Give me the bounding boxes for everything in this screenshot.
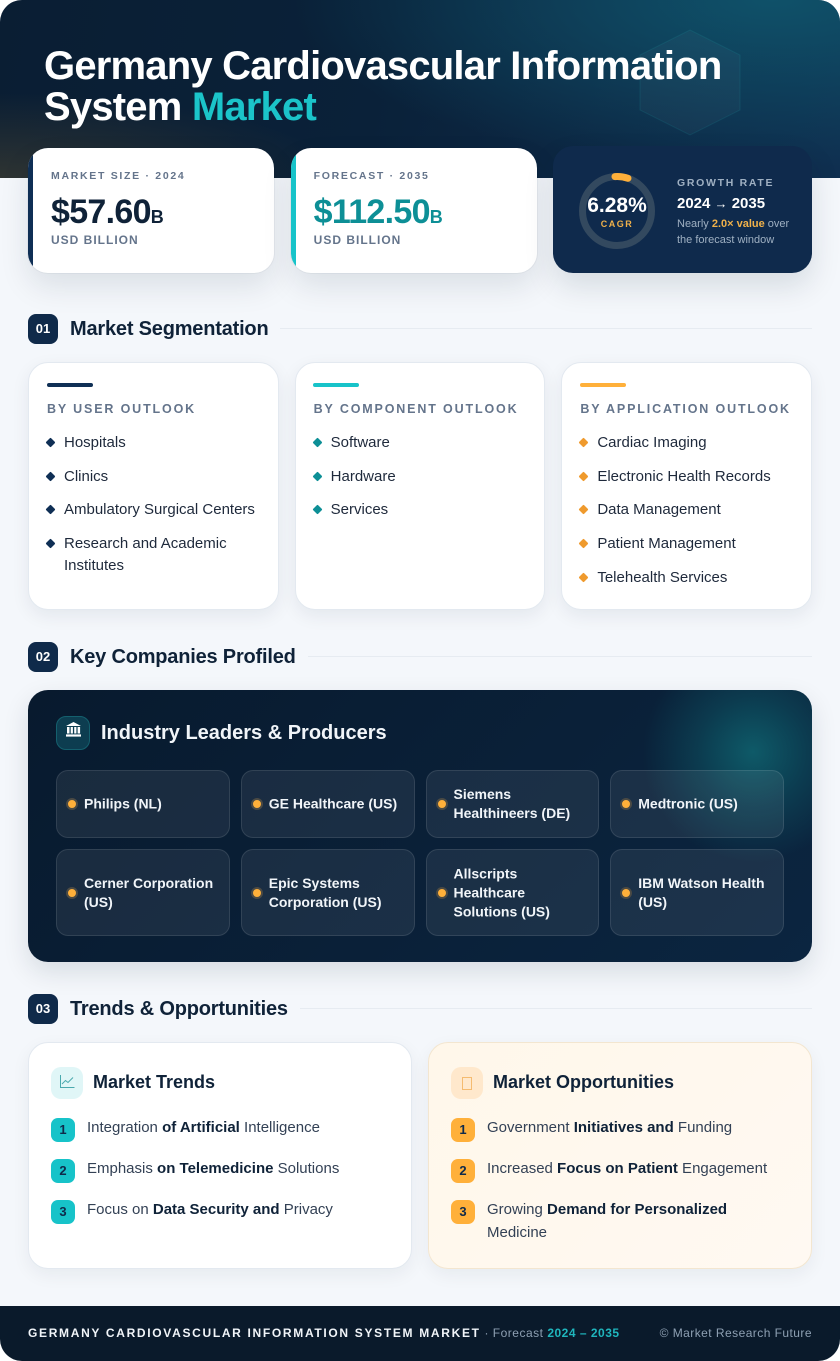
panel heading: Industry Leaders & Producers [101, 722, 387, 744]
section heading: trends: Trends & Opportunities [70, 998, 288, 1020]
growth note: Nearly 2.0× value over [677, 218, 789, 230]
company: Philips [56, 770, 230, 838]
panel: market trends: Integration of Artificial Intelligence [87, 1119, 320, 1136]
panel: component outlook: Hardware [331, 468, 396, 485]
company: Allscripts: Allscripts [454, 865, 517, 881]
opportunity 2: 2 [459, 1163, 467, 1178]
stat card: market size: MARKET SIZE · 2024 [51, 170, 185, 182]
icon: bank [56, 716, 90, 750]
company: Epic [241, 849, 414, 936]
company: Allscripts [426, 849, 599, 936]
company: GE Healthcare [241, 770, 414, 838]
panel: market opportunities: Government Initiatives and Funding [487, 1119, 732, 1136]
panel: application outlook: Data Management [597, 501, 721, 518]
opportunity 1 [451, 1118, 475, 1142]
panel: industry leaders [28, 690, 812, 962]
section heading: key companies [28, 642, 812, 672]
panel: market trends: Focus on Data Security and Privacy [87, 1201, 333, 1218]
company: Allscripts: Healthcare [454, 884, 525, 900]
company: Medtronic [610, 770, 784, 838]
stat card: market size: USD BILLION [51, 233, 139, 247]
panel: component outlook: Services [331, 501, 388, 518]
company: Siemens [426, 770, 599, 838]
trend 2: 2 [59, 1163, 67, 1178]
growth note [677, 218, 789, 246]
header banner [0, 0, 840, 178]
growth rate label: GROWTH RATE [677, 177, 774, 189]
section heading: key companies: Key Companies Profiled [70, 646, 296, 668]
stat card: market size [28, 148, 274, 273]
company: Epic: Corporation (US) [269, 894, 382, 910]
icon: opportunity glyph [451, 1067, 483, 1099]
stat card: forecast: $112.50B [314, 193, 443, 231]
icon: chart [51, 1067, 83, 1099]
opportunity 1: 1 [459, 1122, 467, 1137]
stat card: market size: $57.60B [51, 193, 164, 231]
CAGR label: CAGR [601, 219, 633, 229]
company: Epic: Epic Systems [269, 874, 360, 890]
footer credit: © Market Research Future [660, 1326, 812, 1340]
opportunity 3 [451, 1200, 475, 1224]
panel: component outlook [295, 362, 545, 610]
panel: user outlook: Institutes [64, 556, 124, 574]
trend 1: 1 [59, 1122, 67, 1137]
panel: market opportunities: Medicine [487, 1224, 547, 1241]
panel: application outlook: BY APPLICATION OUTLOOK [580, 402, 791, 416]
footer title: GERMANY CARDIOVASCULAR INFORMATION SYSTEM MARKET · Forecast 2024 – 2035 [28, 1326, 620, 1340]
company: Cerner: (US) [84, 894, 113, 910]
section heading: trends: 03 [36, 1001, 50, 1016]
company: Siemens: Healthineers (DE) [454, 805, 570, 821]
section heading: market segmentation: 01 [36, 321, 50, 336]
panel: user outlook: Research and Academic [64, 535, 227, 552]
section heading: trends [28, 994, 812, 1024]
panel: market opportunities: Market Opportunities [493, 1072, 674, 1092]
panel: component outlook: Software [331, 434, 390, 451]
panel: application outlook [561, 362, 812, 610]
panel: user outlook: Hospitals [64, 434, 126, 451]
panel: application outlook: Patient Management [597, 535, 736, 552]
company: IBM Watson: (US) [638, 894, 667, 910]
panel: application outlook: Cardiac Imaging [597, 434, 707, 451]
title: Germany Cardiovascular Information [44, 44, 721, 88]
section heading: market segmentation [28, 314, 812, 344]
CAGR ring [579, 173, 655, 249]
panel: market opportunities [428, 1042, 812, 1269]
panel: application outlook: Electronic Health Records [597, 468, 771, 485]
title [44, 44, 721, 129]
stat card: forecast: USD BILLION [314, 233, 401, 247]
stat card: forecast: FORECAST · 2035 [314, 170, 430, 182]
trend 3: 3 [59, 1204, 67, 1219]
trend 3 [51, 1200, 75, 1224]
period: 2024 → 2035 [677, 195, 765, 212]
company: IBM Watson [610, 849, 784, 936]
stat card: growth rate [553, 146, 812, 273]
company: Cerner [56, 849, 230, 936]
company: Medtronic: Medtronic (US) [638, 796, 738, 812]
panel: user outlook: Clinics [64, 468, 108, 485]
company: Allscripts: Solutions (US) [454, 903, 550, 919]
company: Cerner: Cerner Corporation [84, 874, 213, 890]
panel: market trends [28, 1042, 412, 1269]
panel: user outlook [28, 362, 279, 610]
panel: component outlook: BY COMPONENT OUTLOOK [314, 402, 518, 416]
company: GE Healthcare: GE Healthcare (US) [269, 796, 397, 812]
panel: market opportunities: Increased Focus on Patient Engagement [487, 1160, 767, 1177]
growth note: the forecast window [677, 234, 774, 246]
stat card: forecast [291, 148, 537, 273]
panel: market opportunities: Growing Demand for Personalized [487, 1201, 727, 1218]
decorative hexagon [640, 30, 740, 136]
company: Siemens: Siemens [454, 786, 511, 802]
CAGR value: 6.28% [587, 194, 647, 217]
opportunity 2 [451, 1159, 475, 1183]
panel: application outlook: Telehealth Services [597, 569, 727, 586]
footer [0, 1306, 840, 1361]
company: Philips: Philips (NL) [84, 796, 162, 812]
panel: user outlook: Ambulatory Surgical Centers [64, 501, 255, 518]
trend 2 [51, 1159, 75, 1183]
panel: market trends: Market Trends [93, 1072, 215, 1092]
title: System Market [44, 85, 316, 129]
panel: user outlook: BY USER OUTLOOK [47, 402, 196, 416]
section heading: key companies: 02 [36, 649, 50, 664]
company: IBM Watson: IBM Watson Health [638, 874, 765, 890]
trend 1 [51, 1118, 75, 1142]
opportunity 3: 3 [459, 1204, 467, 1219]
section heading: market segmentation: Market Segmentation [70, 318, 268, 340]
panel: market trends: Emphasis on Telemedicine Solutions [87, 1160, 339, 1177]
